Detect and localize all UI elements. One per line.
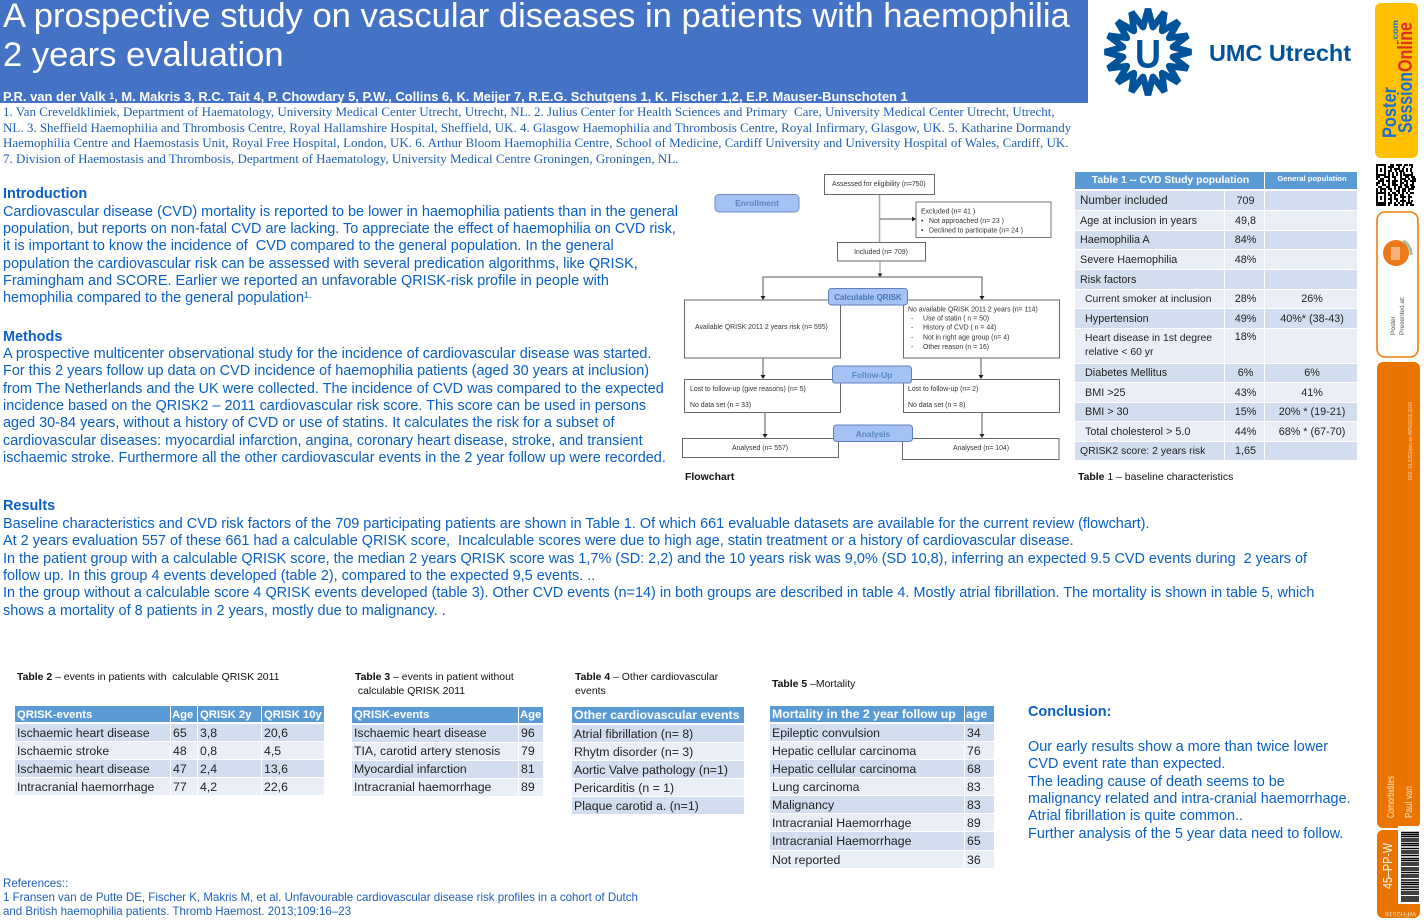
table 4: Aortic Valve pathology (n=1)	[574, 762, 728, 776]
conclusion heading: Conclusion:	[1028, 704, 1111, 720]
table 1: 49%	[1235, 312, 1256, 324]
header banner	[0, 0, 1088, 103]
table 1: 43%	[1235, 386, 1256, 398]
no available QRISK box: Not in right age group (n= 4)	[923, 334, 1009, 342]
table 1: 1,65	[1235, 445, 1256, 457]
excluded box: Not approached (n= 23 )	[929, 218, 1004, 225]
poster session online badge: Poster	[1380, 86, 1401, 138]
table 1: Severe Haemophilia	[1080, 254, 1177, 266]
no available QRISK box: -	[911, 334, 913, 342]
analysed left	[682, 438, 838, 458]
table 2: 48	[173, 744, 187, 758]
table 5: Not reported	[772, 852, 840, 866]
table 2	[15, 706, 324, 795]
assessed box	[824, 174, 934, 194]
table 5: Lung carcinoma	[772, 780, 860, 794]
table 2: Age	[172, 708, 193, 720]
no available QRISK box: -	[911, 316, 913, 322]
table 1: Age at inclusion in years	[1080, 214, 1197, 226]
excluded box: Excluded (n= 41 )	[921, 208, 975, 216]
table 2: 22,6	[264, 780, 288, 794]
table 3: Ischaemic heart disease	[354, 726, 487, 740]
logo: UMC Utrecht: UMC Utrecht	[1209, 40, 1351, 66]
follow-up label: Follow-Up	[852, 370, 892, 380]
analysed right	[902, 438, 1059, 460]
table 1: 44%	[1235, 426, 1256, 438]
table 2: 20,6	[264, 726, 288, 740]
lost to follow-up left: Lost to follow-up (give reasons) (n= 5)	[690, 386, 806, 393]
lost to follow-up right: Lost to follow-up (n= 2)	[908, 386, 978, 393]
table 1: QRISK2 score: 2 years risk	[1080, 446, 1205, 456]
no available QRISK box: -	[911, 324, 913, 332]
available QRISK box: Available QRISK 2011 2 years risk (n= 595)	[695, 324, 828, 331]
methods text: A prospective multicenter observational study for the incidence of cardiovascular disease was started. For this 2 years follow up data on CVD incidence of haemophilia patients (aged 30 years at inclusion) from The Netherlands and the UK were collected. The incidence of CVD was compared to the expected incidence based on the QRISK2 – 2011 cardiovascular risk score. This score can be used in persons aged 30-84 years, without a history of CVD or use of statins. It calculates the risk for a subset of cardiovascular diseases: myocardial infarction, angina, coronary heart disease, stroke, and transient ischaemic stroke. Furthermore all the other cardiovascular events in the 2 year follow up were recorded.	[3, 346, 666, 466]
assessed box: Assessed for eligibility (n=750)	[832, 181, 926, 188]
table 1: 48%	[1235, 254, 1256, 266]
orange info band: DOI: 10.3252/pso.eu.WFH2016.2016	[1408, 402, 1414, 480]
barcode tab: WFH2016	[1385, 910, 1416, 917]
table 5: 83	[967, 780, 981, 794]
QR code	[1376, 164, 1417, 206]
orange info band	[1377, 362, 1420, 828]
enrollment label	[715, 194, 799, 212]
flowchart	[682, 174, 1060, 460]
poster session online badge: .com	[1391, 20, 1400, 42]
table 4: Pericarditis (n = 1)	[574, 780, 674, 794]
no available QRISK box: History of CVD ( n = 44)	[923, 324, 996, 332]
table 1: 709	[1236, 194, 1254, 206]
table 5: 68	[967, 762, 981, 776]
table 1: Number included	[1080, 194, 1168, 207]
analysed right: Analysed (n= 104)	[953, 445, 1009, 452]
table 1: 68% * (67-70)	[1279, 426, 1345, 438]
table 5	[770, 706, 994, 868]
table 1 caption: Table 1 – baseline characteristics	[1078, 472, 1233, 482]
calculable QRISK label	[828, 288, 908, 305]
table 2: 4,2	[200, 780, 217, 794]
table 5: 83	[967, 798, 981, 812]
no available QRISK box: Use of statin ( n = 50)	[923, 316, 989, 322]
barcode tab: 45–PP-W	[1380, 842, 1395, 889]
flowchart caption: Flowchart	[685, 472, 734, 482]
excluded box: •	[921, 228, 924, 234]
table 1: 40%* (38-43)	[1280, 312, 1344, 324]
affiliations: 1. Van Creveldkliniek, Department of Haematology, University Medical Center Utrecht, Utrecht, NL. 2. Julius Center for Health Sciences and Primary Care, University Medical Center Utrecht, Utrecht, NL. 3. Sheffield Haemophilia and Thrombosis Centre, Royal Hallamshire Hospital, Sheffield, UK. 4. Glasgow Haemophilia and Thrombosis Centre, Royal Infirmary, Glasgow, UK. 5. Katharine Dormandy Haemophilia Centre and Haemostasis Unit, Royal Free Hospital, London, UK. 6. Arthur Bloom Haemophilia Centre, School of Medicine, Cardiff University and University Hospital of Wales, Cardiff, UK. 7. Division of Haemostasis and Thrombosis, Department of Haematology, University Medical Centre Groningen, Groningen, NL.	[3, 104, 1071, 166]
excluded box: •	[921, 218, 924, 225]
table 2 caption: Table 2 – events in patients with calculable QRISK 2011	[17, 672, 279, 683]
table 2: Ischaemic heart disease	[17, 762, 150, 776]
table 3: Intracranial haemorrhage	[354, 780, 491, 794]
table 5: Hepatic cellular carcinoma	[772, 744, 916, 758]
analysis label: Analysis	[856, 429, 891, 439]
introduction heading: Introduction	[3, 186, 87, 202]
table 5: 34	[967, 726, 981, 740]
table 5: Intracranial Haemorrhage	[772, 834, 911, 848]
table 1: Hypertension	[1085, 312, 1149, 324]
table 4: Other cardiovascular events	[574, 708, 739, 722]
table 2: 13,6	[264, 762, 288, 776]
table 1: Table 1 -- CVD Study population	[1092, 175, 1249, 186]
table 3: Age	[520, 709, 541, 721]
table 1: Diabetes Mellitus	[1085, 367, 1167, 379]
orange info band: Comorbidites	[1386, 776, 1397, 818]
table 1: Heart disease in 1st degree relative < 60 yr	[1085, 333, 1212, 358]
sidebar	[1375, 3, 1420, 918]
table 1: 6%	[1238, 367, 1253, 379]
enrollment label: Enrollment	[735, 198, 779, 208]
table 1: Risk factors	[1080, 274, 1136, 286]
table 2: QRISK 2y	[200, 708, 251, 720]
table 2: Ischaemic stroke	[17, 744, 109, 758]
follow-up label	[832, 366, 912, 383]
calculable QRISK label: Calculable QRISK	[834, 293, 902, 302]
poster session online badge	[1375, 3, 1418, 158]
no available QRISK box	[904, 300, 1060, 358]
table 1: 6%	[1304, 367, 1320, 379]
authors: P.R. van der Valk 1, M. Makris 3, R.C. Tait 4, P. Chowdary 5, P.W., Collins 6, K. Meijer 7, R.E.G. Schutgens 1, K. Fischer 1,2, E.P. Mauser-Bunschoten 1	[3, 89, 908, 104]
table 4: Plaque carotid a. (n=1)	[574, 798, 699, 812]
methods heading: Methods	[3, 329, 62, 345]
table 2: Ischaemic heart disease	[17, 726, 150, 740]
table 2: 4,5	[264, 744, 281, 758]
table 1: Current smoker at inclusion	[1085, 294, 1211, 304]
table 1: Haemophilia A	[1080, 234, 1150, 246]
table 2: QRISK-events	[17, 708, 92, 720]
table 3	[352, 707, 543, 796]
connectors and arrows	[760, 194, 984, 438]
table 4: Atrial fibrillation (n= 8)	[574, 726, 693, 740]
table 5: 36	[967, 852, 981, 866]
table 4: Rhytm disorder (n= 3)	[574, 744, 693, 758]
barcode tab	[1377, 826, 1421, 918]
table 2: QRISK 10y	[264, 708, 322, 720]
table 1: Total cholesterol > 5.0	[1085, 426, 1190, 438]
excluded box: Declined to participate (n= 24 )	[929, 228, 1023, 234]
included box	[838, 242, 926, 261]
table 5: Malignancy	[772, 798, 834, 812]
lost to follow-up left	[684, 380, 840, 412]
logo: UMC Utrecht: U	[1135, 32, 1161, 76]
table 1: BMI > 30	[1085, 406, 1129, 418]
no available QRISK box: -	[911, 344, 913, 351]
table 2: 0,8	[200, 744, 217, 758]
table 3: TIA, carotid artery stenosis	[354, 744, 500, 758]
table 3 caption: Table 3 – events in patient without calculable QRISK 2011	[355, 672, 514, 697]
table 3: 79	[521, 744, 535, 758]
presented at panel: Poster	[1390, 315, 1397, 335]
poster session online badge: Session	[1395, 72, 1417, 133]
logo: UMC Utrecht	[1104, 8, 1351, 96]
lost to follow-up left: No data set (n = 33)	[690, 402, 751, 409]
table 5: 76	[967, 744, 981, 758]
presented at panel: Presented at:	[1399, 296, 1406, 335]
included box: Included (n= 709)	[854, 249, 908, 256]
table 1: 28%	[1235, 293, 1256, 305]
table 1: 84%	[1235, 234, 1256, 246]
table 3: 81	[521, 762, 535, 776]
results text: Baseline characteristics and CVD risk factors of the 709 participating patients are shown in Table 1. Of which 661 evaluable datasets are available for the current review (flowchart). At 2 years evaluation 557 of these 661 had a calculable QRISK score, Incalculable scores were due to high age, statin treatment or a history of cardiovascular disease. In the patient group with a calculable QRISK score, the median 2 years QRISK score was 1,7% (SD: 2,2) and the 10 years risk was 9,0% (SD 10,8), inferring an expected 9.5 CVD events during 2 years of follow up. In this group 4 events developed (table 2), compared to the expected 9,5 events. .. In the group without a calculable score 4 QRISK events developed (table 3). Other CVD events (n=14) in both groups are described in table 4. Mostly atrial fibrillation. The mortality is shown in table 5, which shows a mortality of 8 patients in 2 years, mostly due to malignancy. .	[3, 516, 1314, 619]
table 2: 77	[173, 780, 187, 794]
table 1: 26%	[1301, 293, 1323, 305]
analysed left: Analysed (n= 557)	[732, 445, 788, 452]
table 2: 2,4	[200, 762, 217, 776]
table 1: 49,8	[1235, 214, 1256, 226]
conclusion text: Our early results show a more than twice lower CVD event rate than expected. The leading cause of death seems to be malignancy related and intra-cranial haemorrhage. Atrial fibrillation is quite common.. Further analysis of the 5 year data need to follow.	[1028, 739, 1351, 842]
table 5: age	[966, 707, 987, 721]
table 1: 41%	[1301, 386, 1323, 398]
available QRISK box	[684, 300, 840, 358]
table 2: 47	[173, 762, 187, 776]
table 1: General population	[1277, 174, 1347, 183]
orange info band: Paul van	[1404, 786, 1415, 818]
table 1: 18%	[1235, 331, 1256, 343]
table 5: Hepatic cellular carcinoma	[772, 762, 916, 776]
lost to follow-up right: No data set (n = 8)	[908, 402, 965, 409]
table 1: 15%	[1235, 406, 1256, 418]
table 1	[1075, 172, 1357, 460]
excluded box	[916, 202, 1051, 238]
no available QRISK box: Other reason (n = 16)	[923, 344, 989, 351]
table 5: Mortality in the 2 year follow up	[772, 707, 956, 721]
poster session online badge: Online	[1395, 22, 1417, 72]
table 3: 96	[521, 726, 535, 740]
results heading: Results	[3, 498, 55, 514]
table 1: 20% * (19-21)	[1279, 406, 1345, 418]
table 5: 65	[967, 834, 981, 848]
table 5: 89	[967, 816, 981, 830]
table 2: 65	[173, 726, 187, 740]
table 3: Myocardial infarction	[354, 762, 467, 776]
lost to follow-up right	[904, 380, 1060, 412]
table 4	[572, 707, 744, 814]
presented at panel	[1377, 212, 1418, 357]
table 3: 89	[521, 780, 535, 794]
table 2: Intracranial haemorrhage	[17, 780, 154, 794]
table 5 caption: Table 5 –Mortality	[772, 679, 855, 690]
analysis label	[834, 425, 912, 442]
table 4 caption: Table 4 – Other cardiovascular events	[575, 672, 718, 697]
table 3: QRISK-events	[354, 709, 429, 721]
table 5: Epileptic convulsion	[772, 726, 880, 740]
introduction text: Cardiovascular disease (CVD) mortality is reported to be lower in haemophilia patients than in the general population, but reports on non-fatal CVD are lacking. To appreciate the effect of haemophilia on CVD risk, it is important to know the incidence of CVD compared to the general population. In the general population the cardiovascular risk can be assessed with several predication algorithms, like QRISK, Framingham and SCORE. Earlier we reported an unfavorable QRISK-risk profile in people with hemophilia compared to the general population1.	[3, 204, 678, 306]
references: References:: 1 Fransen van de Putte DE, Fischer K, Makris M, et al. Unfavourable cardiovascular disease risk profiles in a cohort of Dutch and British haemophilia patients. Thromb Haemost. 2013;109:16–23	[3, 878, 638, 918]
table 1: BMI >25	[1085, 386, 1126, 398]
no available QRISK box: No available QRISK 2011 2 years (n= 114)	[908, 306, 1038, 314]
table 2: 3,8	[200, 726, 217, 740]
table 5: Intracranial Haemorrhage	[772, 816, 911, 830]
